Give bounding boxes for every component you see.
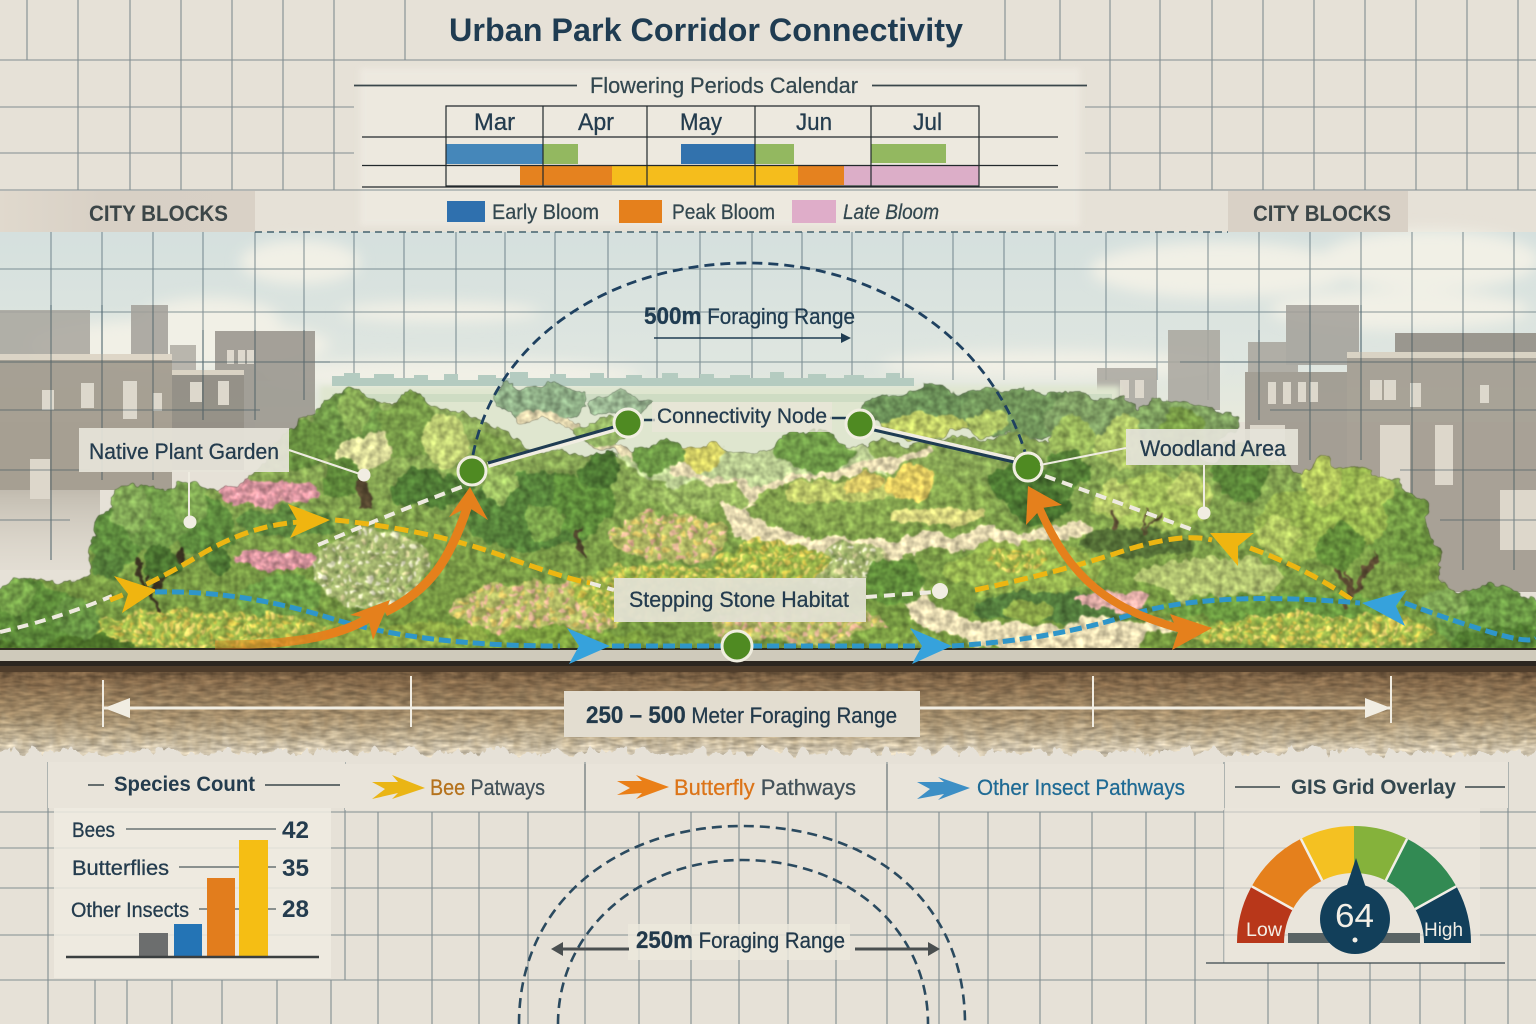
species rows: Other Insects	[71, 899, 189, 922]
calendar legend	[447, 200, 939, 224]
label: stepping stone habitat	[614, 578, 948, 622]
label: stepping stone habitat: Stepping Stone Habitat	[629, 587, 849, 612]
species rows: Butterflies	[72, 857, 169, 880]
panel: flowering calendar	[354, 73, 1087, 224]
pathway: white dashed links	[0, 476, 1196, 632]
species rows: Bees	[72, 819, 115, 842]
species heading: Species Count	[114, 773, 255, 796]
clouds	[30, 230, 1536, 391]
gauge	[1237, 826, 1471, 954]
label: 250m foraging range: 250m Foraging Range	[636, 927, 845, 954]
arcs: 250m foraging range	[519, 826, 965, 1024]
label: 500m foraging range	[644, 303, 855, 343]
back-left canopy	[281, 389, 510, 510]
gis heading: GIS Grid Overlay	[1291, 776, 1456, 799]
title: Urban Park Corridor Connectivity	[449, 12, 963, 48]
winding paths	[522, 416, 1130, 642]
pathway: bee	[110, 504, 1352, 613]
mid-distance trees centre	[572, 412, 1003, 472]
label: native plant garden	[79, 428, 370, 528]
calendar month labels: Jun	[796, 109, 832, 136]
woodland trees right	[990, 406, 1268, 553]
label: 250-500 meter foraging range: 250 – 500 Meter Foraging Range	[586, 702, 897, 729]
legend: butterfly pathways: Butterfly Pathways	[674, 775, 856, 800]
label: native plant garden: Native Plant Garden	[89, 439, 279, 464]
label: woodland area	[1040, 429, 1298, 520]
gauge: High	[1424, 920, 1463, 941]
label: city blocks left	[0, 191, 255, 232]
species bar chart	[66, 840, 319, 957]
far right bushes	[1421, 587, 1536, 653]
calendar month labels	[474, 109, 942, 136]
species rows: 35	[282, 855, 309, 882]
park landscape	[0, 384, 1536, 665]
calendar legend: Early Bloom	[492, 201, 599, 224]
flower meadow left	[0, 481, 490, 656]
label: 500m foraging range: 500m Foraging Range	[644, 303, 855, 330]
gauge: Low	[1246, 920, 1282, 941]
gauge: 64	[1335, 897, 1374, 934]
arc: 500m foraging range	[473, 263, 1025, 455]
legend: other insect pathways: Other Insect Pathways	[977, 775, 1185, 800]
green base mound	[0, 400, 1536, 665]
label: connectivity node: Connectivity Node	[657, 405, 827, 428]
far skyline and haze	[320, 372, 1120, 476]
legend strip panel	[345, 764, 1224, 810]
legend: bee pathways	[372, 775, 545, 800]
meadow island centre	[752, 468, 996, 534]
soil strip	[0, 662, 1536, 752]
calendar month bars	[446, 144, 979, 185]
meadow right	[942, 541, 1438, 649]
centre-left woods	[464, 452, 750, 555]
panel: species count	[48, 762, 345, 978]
species rows	[71, 817, 309, 923]
calendar month labels: May	[680, 109, 722, 136]
light lawn	[610, 445, 890, 500]
label: city blocks right: CITY BLOCKS	[1253, 201, 1391, 226]
dashed city boundary	[255, 231, 1228, 233]
connector lines between nodes	[488, 418, 1014, 465]
calendar heading: Flowering Periods Calendar	[590, 73, 858, 98]
flower meadow centre	[410, 513, 948, 652]
label: city blocks right	[1228, 191, 1408, 232]
buildings right	[1097, 305, 1536, 592]
label: woodland area: Woodland Area	[1140, 436, 1287, 461]
calendar legend: Peak Bloom	[672, 201, 775, 224]
calendar month labels: Jul	[913, 109, 942, 136]
calendar month labels: Apr	[578, 109, 614, 136]
species rows: 28	[282, 896, 309, 923]
panel: GIS grid overlay	[1206, 762, 1508, 963]
connectivity nodes	[458, 409, 1042, 661]
legend: bee pathways: Bee Patways	[430, 775, 545, 800]
buildings left	[0, 305, 315, 570]
sky	[0, 232, 1536, 422]
label: 250-500 meter foraging range	[564, 691, 920, 737]
pathway: other insects	[155, 590, 1536, 664]
calendar grid lines	[362, 106, 1058, 187]
label: city blocks left: CITY BLOCKS	[89, 201, 228, 226]
pathway: butterfly	[215, 486, 1212, 650]
big tree right	[1257, 460, 1435, 605]
dimension line: 250-500 m	[103, 676, 1391, 727]
label: 250m foraging range	[551, 924, 940, 960]
light header panel behind calendar	[360, 68, 1080, 226]
calendar legend: Late Bloom	[843, 201, 939, 224]
species rows: 42	[282, 817, 309, 844]
big tree left	[92, 482, 235, 615]
distant pale trees	[496, 384, 1240, 449]
calendar month labels: Mar	[474, 109, 515, 136]
far left bushes	[0, 581, 104, 647]
concrete walkway	[0, 648, 1536, 666]
